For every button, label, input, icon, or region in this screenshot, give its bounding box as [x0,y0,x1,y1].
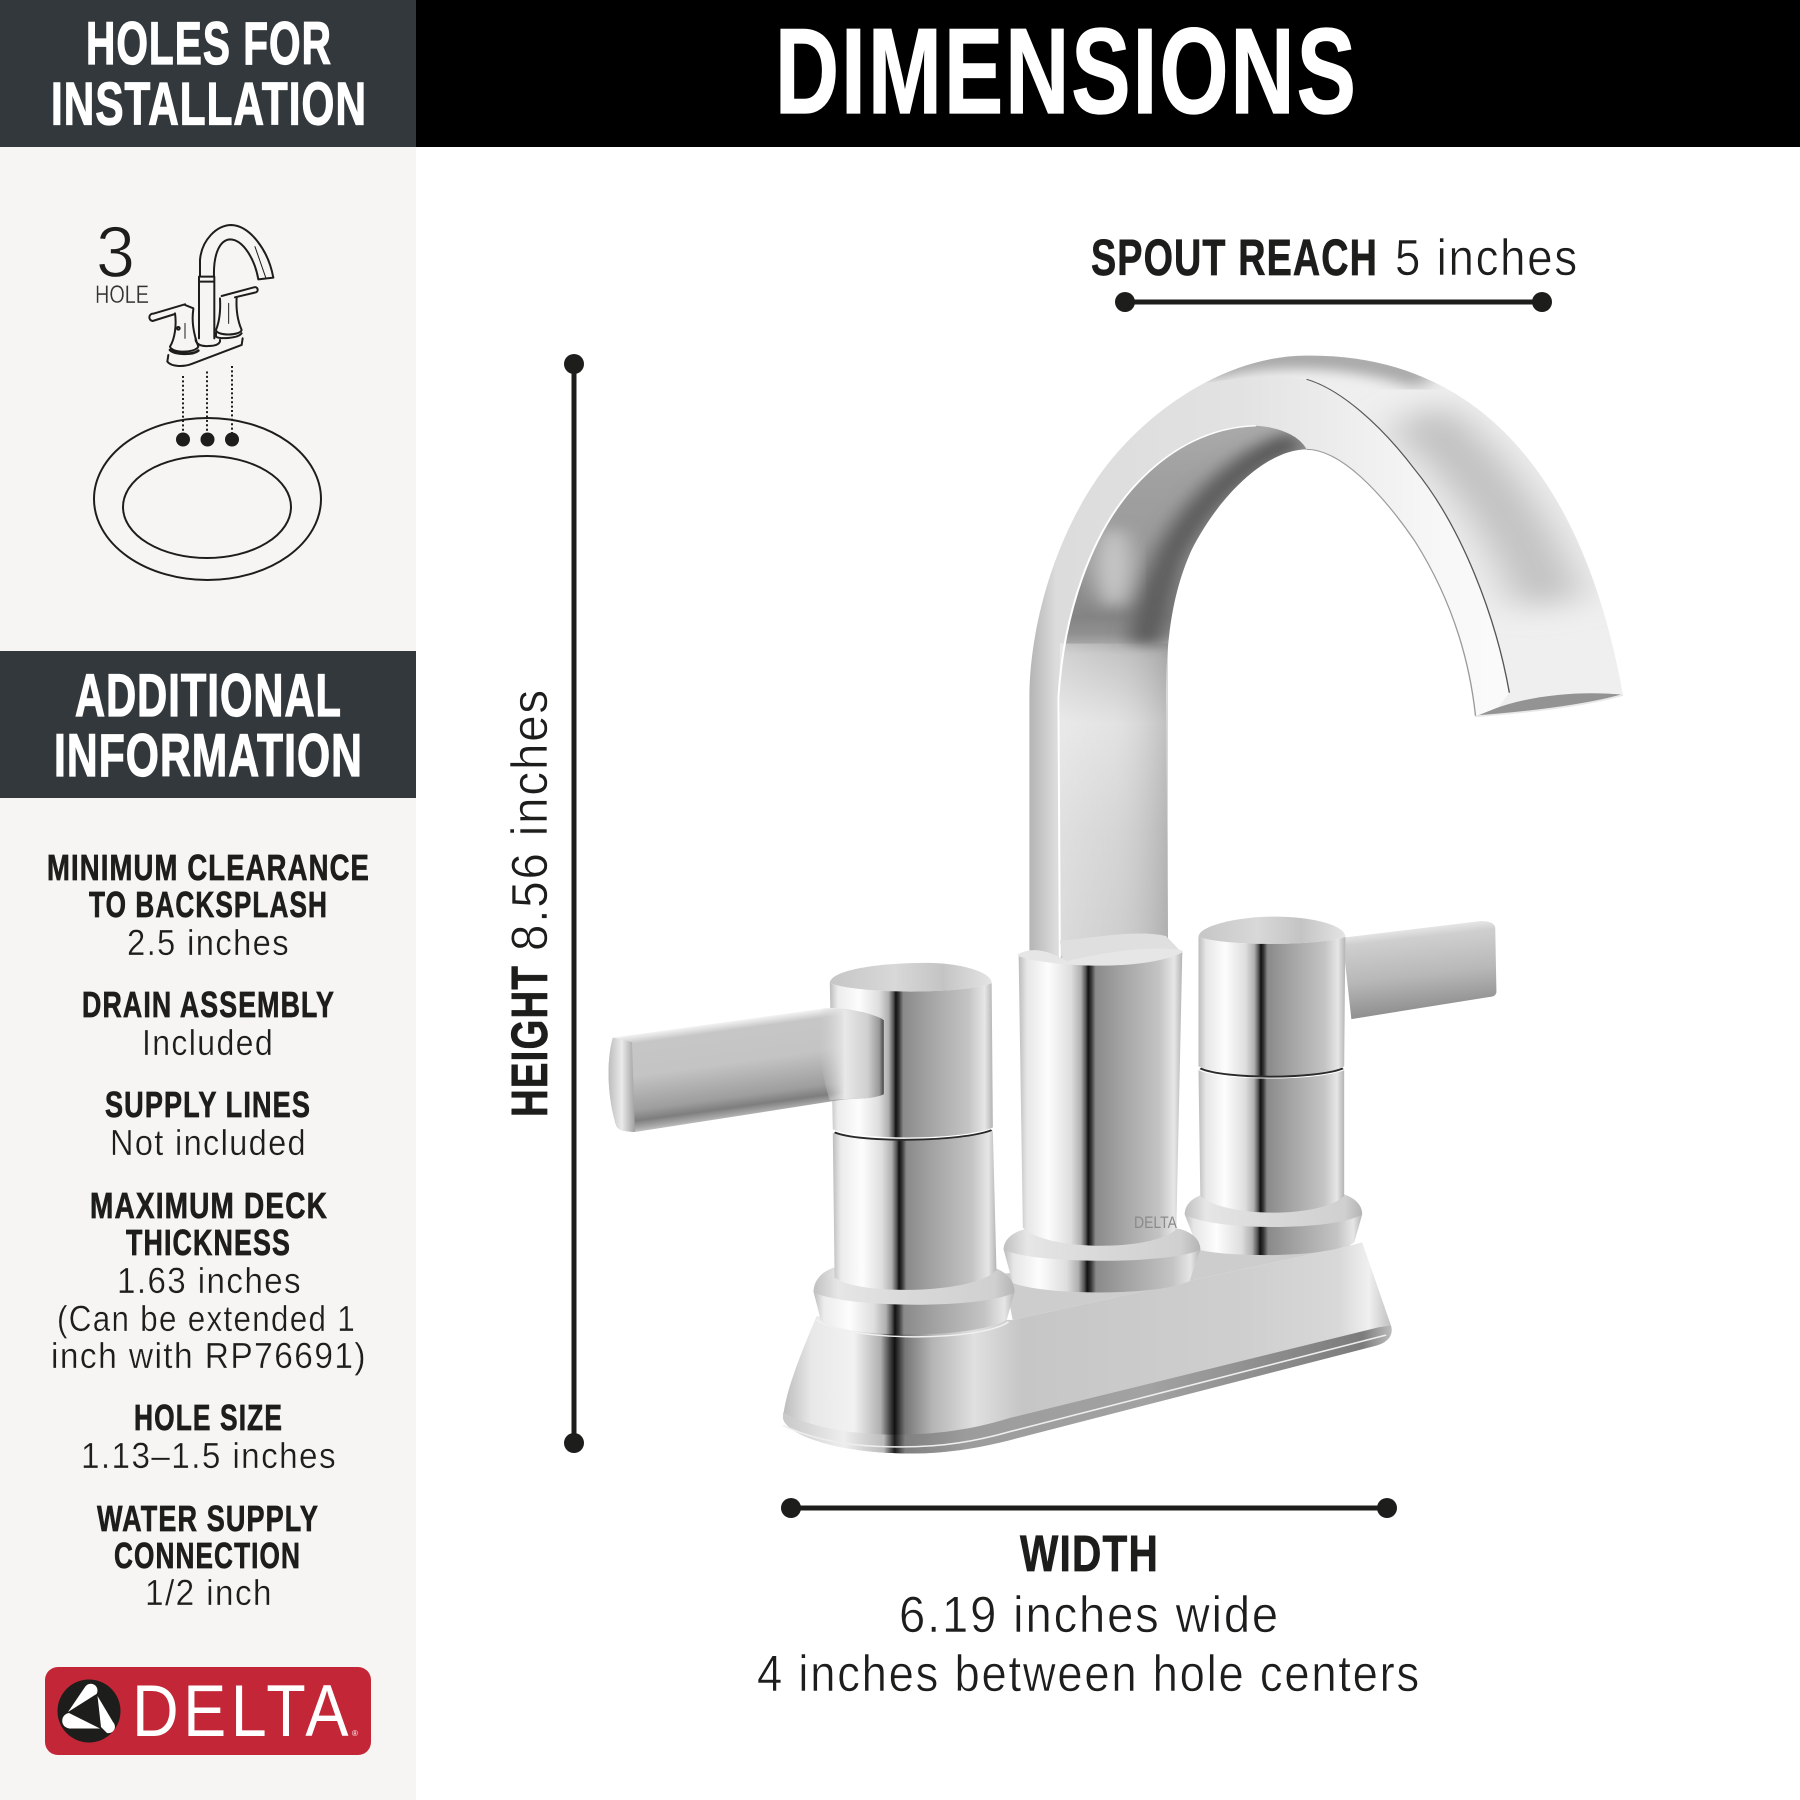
icon: faucet line drawing [149,225,273,366]
spec: supply lines: Not included [110,1122,307,1163]
right lever handle [1342,921,1496,1019]
spec: drain assembly [82,984,335,1063]
logo: delta: DELTA [132,1671,353,1752]
panel heading: additional information: INFORMATION [54,722,363,789]
spec: maximum deck thickness: inch with RP76691) [51,1335,367,1376]
dimension: spout reach: SPOUT REACH [1091,229,1378,286]
spec: drain assembly: DRAIN ASSEMBLY [82,984,335,1025]
left lower body [833,1131,996,1290]
icon: sink basin [94,418,321,580]
dimension: width: 4 inches between hole centers [757,1645,1421,1702]
product: chrome faucet [609,340,1685,1453]
logo: delta [45,1667,371,1755]
spec: hole size: HOLE SIZE [134,1397,283,1438]
icon: delta emblem [58,1680,120,1742]
label: 3 hole: 3 [96,213,135,293]
dimension: width: 6.19 inches wide [899,1586,1280,1643]
logo: delta: ® [352,1729,358,1738]
spec: water supply connection: CONNECTION [114,1535,301,1576]
faucet mounting holes [176,432,239,446]
label: 3 hole: HOLE [95,281,149,309]
spec: minimum clearance [47,847,370,963]
dimension: height: HEIGHT [501,965,558,1117]
spec: maximum deck thickness [51,1185,367,1376]
dimension: spout reach: 5 inches [1395,229,1579,286]
dotted drop lines [183,366,232,433]
embossed brand mark: DELTA [1134,1213,1178,1232]
left knob [830,963,993,1140]
panel heading: holes for installation [0,0,416,147]
right lower body [1198,1070,1344,1213]
spec: maximum deck thickness: MAXIMUM DECK [90,1185,328,1226]
dimension: spout reach [1091,229,1579,312]
dimension: width [757,1498,1421,1702]
spec: hole size [81,1397,337,1476]
spec: maximum deck thickness: 1.63 inches [117,1260,302,1301]
deck plate back surface [1004,1242,1354,1320]
panel heading: holes for installation: INSTALLATION [51,70,367,138]
faucet base [783,1242,1392,1453]
dimension: width: WIDTH [1020,1525,1159,1582]
panel heading: additional information [0,651,416,798]
faucet body and handles [609,917,1496,1453]
spec: supply lines: SUPPLY LINES [105,1084,311,1125]
panel heading: holes for installation: HOLES FOR [86,10,332,77]
spec: minimum clearance: 2.5 inches [127,922,290,963]
label: 3 hole [95,213,149,309]
spec: drain assembly: Included [142,1022,274,1063]
spec list [47,847,370,1613]
spec: water supply connection [97,1498,319,1613]
faucet spout [1029,356,1624,961]
base trim [783,1326,1392,1453]
spec: maximum deck thickness: (Can be extended 1 [57,1298,356,1339]
panel heading: additional information: ADDITIONAL [75,662,342,729]
right knob [1198,917,1345,1077]
spec: maximum deck thickness: THICKNESS [126,1222,291,1263]
centre column ring [1004,1227,1200,1292]
spec: supply lines [105,1084,311,1163]
panel: sidebar [0,0,416,1800]
left base ring [814,1264,1014,1335]
centre column [1017,948,1182,1246]
left lever handle [609,1008,884,1132]
spec: minimum clearance: MINIMUM CLEARANCE [47,847,370,888]
base shoulder line [817,1320,1008,1337]
right base ring [1185,1192,1362,1255]
spec: water supply connection: 1/2 inch [145,1572,273,1613]
spec: water supply connection: WATER SUPPLY [97,1498,319,1539]
spec: minimum clearance: TO BACKSPLASH [89,884,328,925]
dimension: height: 8.56 inches [501,688,558,951]
spec: hole size: 1.13–1.5 inches [81,1435,337,1476]
header band: dimensions [416,0,1800,147]
dimension: height [501,354,584,1453]
title: dimensions: DIMENSIONS [775,3,1358,139]
icon: three hole sink diagram [94,213,321,580]
